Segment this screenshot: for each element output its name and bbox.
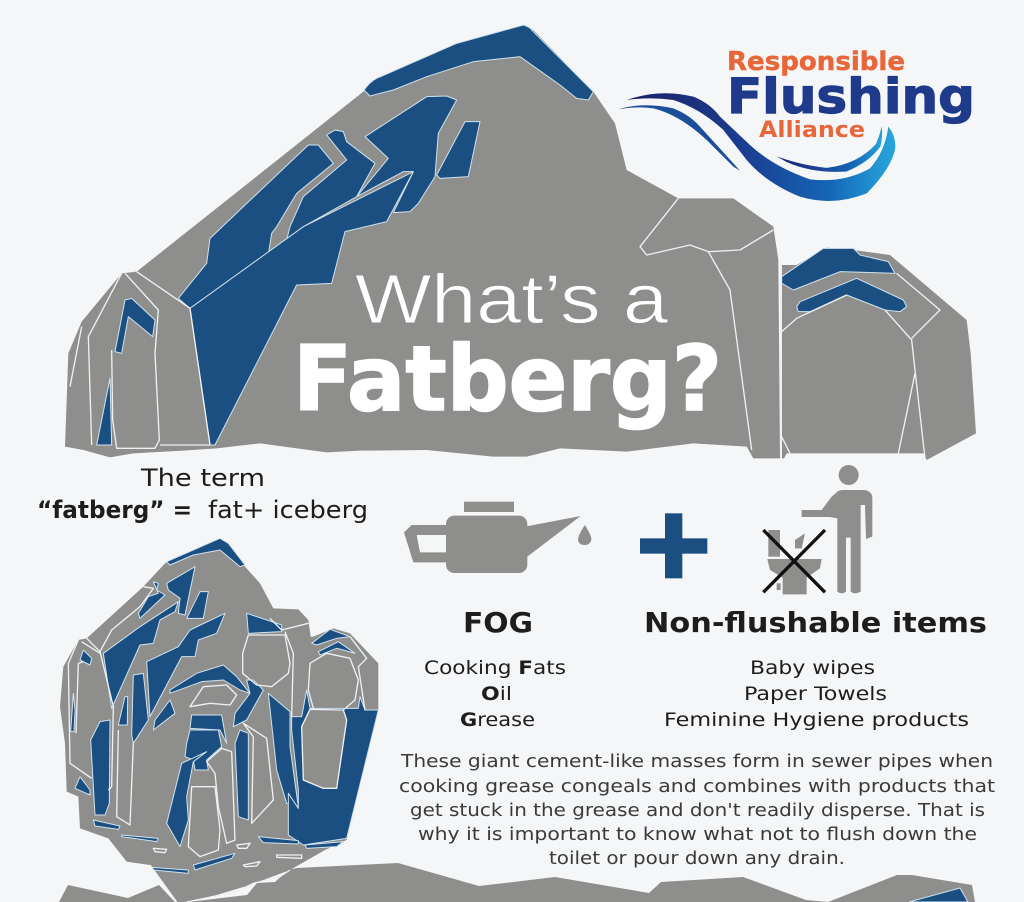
- illustration: small fatberg in pipe: [60, 538, 378, 902]
- icon: plus: [640, 513, 707, 578]
- logo swoosh: [618, 93, 895, 201]
- explanatory paragraph: why it is important to know what not to flush down the: [418, 824, 977, 845]
- title: [293, 260, 722, 432]
- column: non-flushable items: [644, 606, 987, 731]
- FOG heading: FOG: [463, 606, 533, 639]
- small iceberg blue facets: [71, 538, 378, 873]
- FOG list: Cooking Fats: [424, 657, 566, 679]
- iceberg silhouette right mass: [782, 248, 976, 460]
- FOG list: Grease: [460, 709, 535, 731]
- iceberg silhouette left mass: [65, 25, 780, 458]
- illustration: large fatberg iceberg: [65, 25, 976, 460]
- title line 2: Fatberg?: [293, 327, 722, 432]
- logo word Responsible: Responsible: [727, 47, 905, 77]
- icon: oil can: [404, 502, 591, 573]
- term definition: [37, 464, 368, 524]
- non-flushable list: Baby wipes: [750, 657, 875, 679]
- explanatory paragraph: cooking grease congeals and combines with products that: [399, 776, 995, 797]
- icon: person at toilet with cross: [763, 465, 872, 594]
- non-flushable list: Paper Towels: [744, 683, 887, 705]
- term line 1: The term: [140, 464, 265, 492]
- explanatory paragraph: [399, 751, 995, 869]
- non-flushable list: Feminine Hygiene products: [664, 709, 969, 731]
- small iceberg white outlines: [68, 587, 367, 902]
- explanatory paragraph: toilet or pour down any drain.: [549, 848, 845, 869]
- FOG list: Oil: [481, 683, 512, 705]
- explanatory paragraph: get stuck in the grease and don't readily disperse. That is: [410, 800, 985, 821]
- white facet outlines: [70, 198, 940, 458]
- icons row: [404, 465, 872, 594]
- non-flushable list: [664, 657, 969, 731]
- column: FOG: [424, 606, 566, 731]
- non-flushable heading: Non-flushable items: [644, 606, 987, 639]
- logo word Alliance: Alliance: [759, 118, 865, 143]
- illustration: next iceberg peeking at page bottom: [59, 863, 975, 902]
- FOG list: [424, 657, 566, 731]
- small iceberg silhouette: [60, 538, 378, 902]
- explanatory paragraph: These giant cement-like masses form in sewer pipes when: [400, 751, 993, 772]
- logo: Responsible Flushing Alliance: [618, 47, 975, 201]
- small iceberg gray inset in blue: [302, 709, 347, 788]
- blue ice facets: [97, 25, 907, 445]
- blue facet at bottom right: [909, 888, 968, 902]
- term plain: fat+ iceberg: [208, 496, 368, 524]
- logo word Flushing: Flushing: [727, 69, 975, 125]
- term bold: “fatberg” =: [37, 496, 192, 524]
- title line 1: What’s a: [355, 260, 668, 338]
